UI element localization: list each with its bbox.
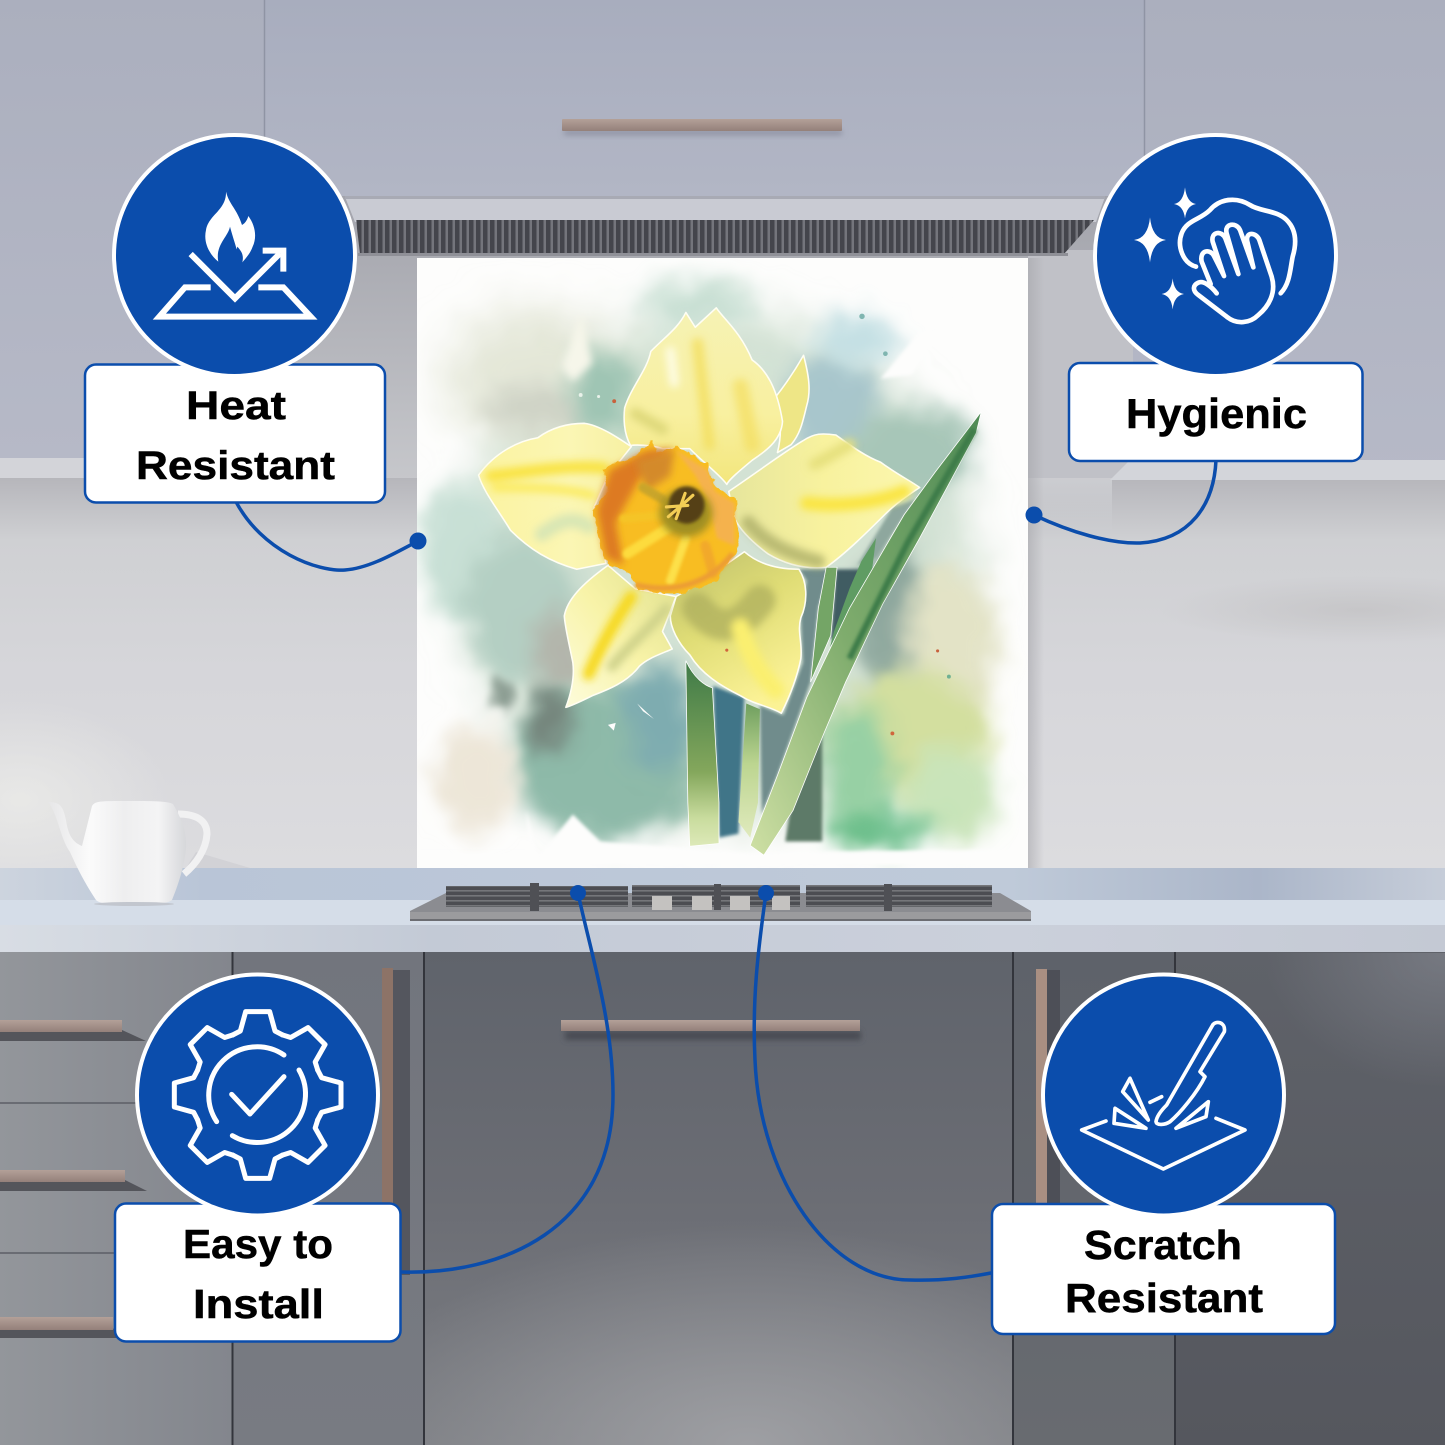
wall behind the hood [0, 190, 1445, 480]
wall light patch bottom left [0, 700, 170, 900]
corona yellow rays [624, 488, 713, 581]
corona throat [669, 486, 705, 524]
wall patch beside panel right [1028, 478, 1112, 548]
panel cast shadow right [1028, 258, 1044, 868]
icon circle [137, 974, 378, 1216]
label text: Scratch [1084, 1222, 1242, 1268]
flower petals [479, 308, 920, 713]
icon circle [1095, 135, 1336, 376]
label box [1069, 363, 1362, 461]
left petal [479, 423, 631, 569]
back petal [775, 355, 809, 453]
icon: hand wiping with sparkles [1134, 187, 1295, 322]
icon circle [1043, 974, 1284, 1216]
label text: Heat [186, 384, 286, 428]
connector: easy to install [402, 885, 613, 1272]
corona olive shadow around throat [659, 489, 712, 537]
upper cabinet handle [562, 119, 842, 135]
cabinet seams [264, 0, 1144, 196]
worktop front lower band [0, 925, 1445, 953]
right petal [729, 434, 920, 568]
short leaf [830, 538, 876, 647]
middle stem [738, 703, 760, 838]
paint flecks [579, 314, 951, 735]
paper white cut-outs [554, 344, 973, 865]
vertical door handles [382, 968, 1060, 1275]
right wall cabinet [1110, 0, 1445, 478]
left cabinet bottom ledge [0, 458, 132, 478]
long leaf [750, 412, 981, 855]
middle wall cabinet [265, 0, 1144, 196]
label box [992, 1204, 1335, 1334]
icon circle [114, 135, 355, 376]
callout: heat resistant [85, 135, 385, 502]
centre door handle [561, 1020, 861, 1040]
corona left orange rim [597, 449, 674, 565]
drawer handles [0, 1020, 147, 1338]
wall shadow band right [1160, 576, 1445, 644]
panel: daffodil splashback [417, 258, 1028, 868]
cooker hood [345, 196, 1105, 256]
icon: flame over reflecting surface [159, 192, 311, 317]
watercolour background wash [421, 281, 998, 845]
tiled wall [0, 478, 1445, 870]
label text line two: Resistant [1065, 1275, 1263, 1321]
label box [85, 364, 385, 502]
dark backdrop behind stems [713, 499, 916, 842]
soft paper highlight top left [561, 328, 596, 384]
icon: knife scratching surface [1082, 1022, 1245, 1169]
corona top rim [635, 451, 674, 491]
lower cabinet fronts [0, 952, 1445, 1445]
label text: Easy to [183, 1221, 333, 1267]
right cabinet bottom ledge [1110, 460, 1445, 480]
icon: gear with check mark [174, 1012, 341, 1178]
corona bottom rim [635, 554, 733, 588]
corona body [592, 441, 740, 595]
connector: heat resistant [235, 500, 426, 570]
label box [115, 1204, 400, 1342]
left stem [686, 661, 719, 846]
petal shading strokes [491, 344, 904, 690]
white teapot [48, 801, 250, 906]
worktop surface [0, 868, 1445, 901]
long leaf dark vein [850, 429, 974, 659]
top petal [624, 308, 783, 484]
bottom right petal [670, 552, 806, 713]
stems and leaves [686, 412, 981, 855]
watercolour daffodil artwork [417, 258, 1028, 866]
connector: scratch resistant [754, 885, 991, 1280]
stamen [666, 493, 693, 519]
bottom left petal [564, 565, 676, 707]
worktop front upper band [0, 900, 1445, 926]
left wall cabinet [0, 0, 264, 458]
connector: hygienic [1026, 460, 1216, 543]
orange corona [592, 441, 740, 595]
cooktop [410, 883, 1031, 921]
corona right fold [676, 451, 735, 546]
label text: Hygienic [1126, 390, 1307, 437]
callout: scratch resistant [992, 974, 1335, 1334]
label text line two: Install [193, 1281, 324, 1327]
callout: hygienic [1069, 135, 1362, 461]
label text line two: Resistant [136, 444, 335, 488]
upper thin stem [811, 567, 837, 682]
callout: easy to install [115, 974, 400, 1342]
wall between hood and right cabinet [1028, 250, 1133, 480]
